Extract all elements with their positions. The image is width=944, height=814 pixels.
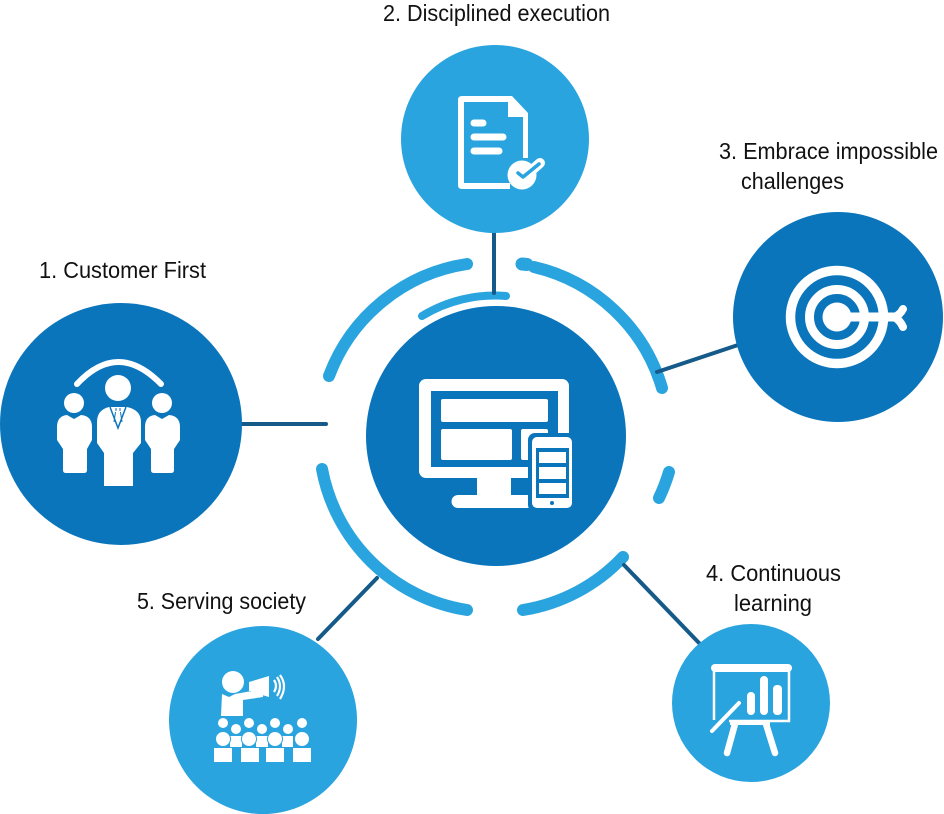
heading 3 (719, 138, 938, 194)
icon: presentation board (711, 664, 792, 753)
icon: speaker with audience (214, 671, 311, 762)
node 4: continuous learning (672, 560, 841, 782)
heading 4: 4. Continuous (706, 560, 841, 586)
node 5: serving society (137, 588, 357, 814)
node 3: embrace impossible challenges (719, 138, 943, 422)
node 1: customer first (0, 257, 242, 545)
heading 2: 2. Disciplined execution (383, 0, 610, 26)
icon: three people (57, 362, 180, 486)
heading 3: challenges (741, 168, 844, 194)
ring arcs around hub (322, 264, 669, 610)
icon: target with arrow (790, 270, 903, 364)
icon: monitor and phone (419, 379, 576, 512)
icon: document with check (458, 96, 540, 190)
node 2: disciplined execution (383, 0, 610, 233)
heading 4 (706, 560, 841, 616)
heading 5: 5. Serving society (137, 588, 306, 614)
connector lines (242, 232, 738, 644)
heading 1: 1. Customer First (39, 257, 207, 283)
heading 4: learning (734, 590, 812, 616)
hub: central circle with devices icon (366, 306, 626, 566)
